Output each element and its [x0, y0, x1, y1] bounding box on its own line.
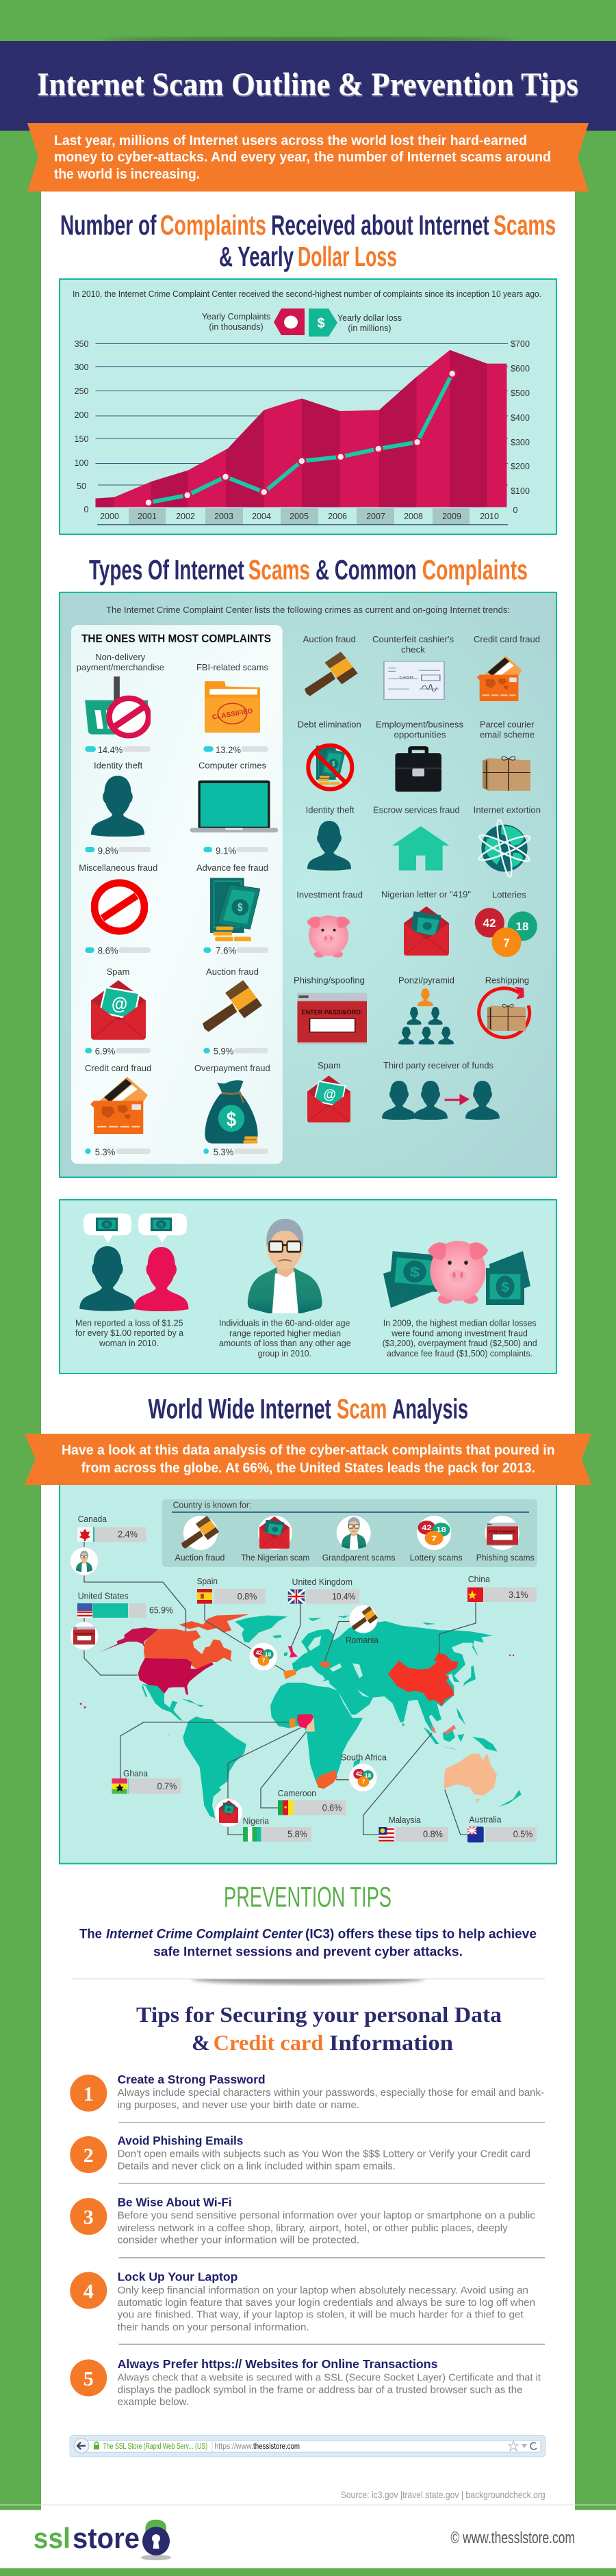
item: auction fraud trend: Auction fraud [303, 634, 356, 644]
legend: Yearly Complaints [202, 312, 270, 321]
tip 5: 5 [84, 2367, 94, 2390]
item: parcel scheme [480, 720, 535, 791]
item: nigerian letter: Nigerian letter or "419" [381, 889, 471, 899]
item: auction fraud trend [303, 634, 358, 696]
tip 3: 3 [84, 2206, 94, 2229]
heading: tips for securing data: Information [329, 2030, 453, 2055]
year axis: 2001 [138, 512, 157, 521]
browser address bar: thesslstore.com [253, 2443, 300, 2451]
map islands [79, 1655, 514, 1709]
item: lotteries [475, 890, 537, 957]
right axis labels: $600 [511, 364, 530, 373]
heading: complaints and dollar loss: & Yearly [219, 241, 294, 272]
country: spain [197, 1576, 266, 1604]
heading: tips for securing data [136, 2002, 502, 2055]
icon badge: nigerian scam [215, 1799, 242, 1826]
country: united kingdom: United Kingdom [292, 1577, 352, 1587]
legend item: lottery scams: Lottery scams [410, 1553, 463, 1563]
item: employment: Employment/business [376, 720, 464, 730]
tip 3: consider whether your information will be protected. [118, 2235, 359, 2246]
heading: types of scams: & Common [316, 554, 417, 586]
intro ribbon [27, 123, 589, 192]
line: yearly dollar loss [145, 370, 456, 506]
year axis: 2007 [366, 512, 385, 521]
icon badge: phishing us [70, 1622, 99, 1650]
legend: Yearly dollar loss [337, 313, 402, 323]
country: ghana [112, 1768, 181, 1793]
ribbon text [62, 1443, 555, 1476]
legend: (in millions) [348, 324, 392, 333]
country: united states: 65.9% [149, 1605, 173, 1616]
item: miscellaneous fraud: Miscellaneous fraud [79, 863, 157, 873]
legend item: nigerian scam: The Nigerian scam [241, 1553, 309, 1563]
country: united states: United States [78, 1591, 129, 1601]
item: overpayment fraud: Overpayment fraud [194, 1063, 270, 1073]
item: identity theft trend: Identity theft [306, 804, 355, 815]
item: spam: 6.9% [95, 1046, 115, 1057]
right axis labels: $300 [511, 438, 530, 447]
icon: piggy bank and money [383, 1241, 530, 1308]
country: china [467, 1574, 537, 1602]
country: canada: 2.4% [118, 1529, 138, 1540]
text: median losses [383, 1318, 537, 1358]
item: credit card fraud: Credit card fraud [85, 1063, 151, 1073]
browser address bar: The SSL Store (Rapid Web Serv... (US) [103, 2443, 207, 2451]
tip 1: ing purposes, and never use your birth date or name. [118, 2100, 359, 2111]
top band shadow [103, 38, 513, 47]
right axis labels: $200 [511, 462, 530, 471]
item: escrow [373, 804, 460, 871]
legend item: phishing scams [476, 1516, 535, 1563]
item: fbi scams: FBI-related scams [196, 662, 268, 672]
legend item: phishing scams: Phishing scams [476, 1553, 535, 1563]
legend: $ [317, 316, 325, 331]
item: miscellaneous fraud [79, 863, 157, 956]
item: advance fee fraud: 7.6% [216, 945, 236, 956]
map: eastern landmasses [270, 1616, 522, 1807]
heading: tips for securing data: & [192, 2030, 210, 2055]
item: identity theft: 9.8% [98, 845, 118, 856]
area: yearly complaints [95, 345, 506, 510]
panel: demographics [60, 1200, 556, 1374]
text: median losses: were found among investment fraud [391, 1328, 528, 1338]
tip 4: Lock Up Your Laptop [118, 2270, 238, 2284]
tip 2 [70, 2134, 530, 2173]
icon badge: grandparent canada [70, 1547, 99, 1575]
country: nigeria [243, 1815, 311, 1841]
left axis labels: 0 [84, 505, 89, 514]
tip 2: Don't open emails with subjects such as You Won the $$$ Lottery or Verify your Credit card [118, 2149, 530, 2160]
heading: complaints and dollar loss: Number of [60, 209, 157, 241]
text: age [219, 1318, 351, 1358]
item: advance fee fraud: Advance fee fraud [196, 863, 268, 873]
item: extortion: Internet extortion [474, 804, 541, 815]
intro text [54, 133, 551, 182]
tip 1: Always include special characters within your passwords, especially those for email and bank- [118, 2088, 544, 2099]
right axis labels [511, 339, 530, 515]
item: spam trend [307, 1060, 350, 1122]
item: extortion [474, 804, 541, 878]
item: identity theft trend [306, 804, 355, 871]
item: counterfeit check [372, 634, 454, 699]
legend item: nigerian scam [241, 1516, 309, 1563]
text: gender: woman in 2010. [99, 1338, 159, 1348]
item: third party receiver: Third party receiver of funds [383, 1060, 493, 1070]
country: ghana: 0.7% [157, 1780, 177, 1791]
heading: complaints and dollar loss: Dollar Loss [298, 241, 397, 272]
left axis labels: 50 [77, 482, 86, 491]
item: auction fraud [203, 967, 268, 1057]
item: miscellaneous fraud: 8.6% [98, 945, 118, 956]
country: china: China [468, 1574, 491, 1584]
item: computer crimes: Computer crimes [198, 761, 266, 770]
item: fbi scams [196, 662, 268, 755]
item: non-delivery [77, 652, 164, 755]
item: lotteries: 7 [503, 936, 510, 949]
left axis labels: 150 [75, 434, 88, 444]
tip 2: Details and never click on a link included within spam emails. [118, 2161, 396, 2172]
tip 4: automatic login feature that saves your login credentials and always be sure to log off when [118, 2298, 535, 2309]
left axis labels: 200 [75, 410, 88, 420]
year axis: 2010 [480, 512, 499, 521]
item: parcel scheme: email scheme [480, 730, 535, 740]
item: escrow: Escrow services fraud [373, 804, 460, 815]
left axis labels: 100 [75, 458, 88, 468]
prevention intro: Internet Crime Complaint Center [106, 1927, 304, 1941]
country: south africa [341, 1752, 387, 1791]
icon: older man [248, 1219, 322, 1313]
panel intro: The Internet Crime Complaint Center lists the following crimes as current and on-going Internet trends: [106, 605, 510, 615]
year axis: 2004 [252, 512, 271, 521]
tip 1: Create a Strong Password [118, 2073, 266, 2086]
text: gender: Men reported a loss of $1.25 [75, 1317, 183, 1328]
country: cameroon: 0.6% [322, 1802, 342, 1813]
tip 5 [70, 2357, 541, 2408]
country: united states [77, 1591, 173, 1618]
tip 3: Before you send sensitive personal information over your laptop or smartphone on a public [118, 2211, 535, 2222]
tip 3 [70, 2196, 535, 2246]
text: age: group in 2010. [258, 1348, 311, 1358]
tip 1: 1 [84, 2083, 94, 2105]
footer [0, 2510, 616, 2568]
item: phishing [294, 975, 367, 1044]
text: median losses: ($3,200), overpayment fraud ($2,500) and [383, 1338, 537, 1348]
item: lotteries: 18 [516, 920, 528, 933]
country: nigeria: 5.8% [287, 1828, 307, 1839]
tip 5: example below. [118, 2397, 189, 2408]
panel: complaints chart [60, 279, 556, 534]
heading: tips for securing data: Credit card [214, 2030, 324, 2055]
legend: (in thousands) [209, 322, 264, 332]
country: australia: Australia [469, 1815, 502, 1825]
item: non-delivery: Non-delivery [95, 652, 146, 662]
item: computer crimes [190, 761, 278, 856]
heading: types of scams: Complaints [422, 554, 528, 586]
item: non-delivery: payment/merchandise [77, 662, 164, 672]
tip 2: 2 [84, 2144, 94, 2167]
sources: Source: ic3.gov |travel.state.gov | backgroundcheck.org [341, 2489, 546, 2500]
item: investment fraud: Investment fraud [296, 890, 363, 900]
analysis ribbon [25, 1434, 591, 1485]
country: nigeria: Nigeria [243, 1815, 270, 1826]
heading: types of scams: Types Of Internet [89, 554, 244, 586]
year axis: 2005 [290, 512, 309, 521]
right axis labels: $100 [511, 486, 530, 496]
country: united kingdom: 10.4% [332, 1591, 356, 1602]
tip 4: you are finished. That way, if your laptop is stolen, it will be much harder for a thief to get [118, 2310, 524, 2321]
ribbon text: from across the globe. At 66%, the United States leads the pack for 2013. [81, 1461, 535, 1476]
item: debt elimination: Debt elimination [298, 720, 361, 730]
year axis: 2006 [328, 512, 347, 521]
map: western landmasses [100, 1614, 298, 1818]
country: canada [77, 1514, 146, 1542]
item: spam [85, 967, 151, 1057]
browser address bar [70, 2435, 546, 2457]
country: south africa: South Africa [341, 1752, 387, 1762]
icon: loss by gender [79, 1213, 189, 1311]
item: employment [376, 720, 464, 792]
logo: ssl store: ssl [34, 2522, 70, 2554]
year axis: 2000 [100, 512, 119, 521]
ribbon text: Have a look at this data analysis of the cyber-attack complaints that poured in [62, 1443, 555, 1458]
item: parcel scheme: Parcel courier [480, 720, 535, 730]
country: australia [467, 1815, 537, 1843]
item: third party receiver [382, 1060, 500, 1120]
item: credit card trend: Credit card fraud [474, 634, 540, 644]
year axis: 2002 [176, 512, 195, 521]
legend: country is known for [162, 1499, 537, 1567]
panel: types of scams [60, 592, 556, 1177]
title banner [0, 41, 616, 131]
country: australia: 0.5% [513, 1828, 532, 1839]
heading: complaints and dollar loss: Complaints [160, 209, 266, 241]
text: median losses: In 2009, the highest median dollar losses [383, 1318, 537, 1328]
country: malaysia: 0.8% [423, 1828, 443, 1839]
item: ponzi: Ponzi/pyramid [398, 975, 454, 985]
country: romania: Romania [346, 1635, 379, 1645]
title: Internet Scam Outline & Prevention Tips [37, 66, 578, 103]
country: cameroon [278, 1788, 346, 1815]
item: computer crimes: 9.1% [216, 845, 236, 856]
tip 3: wireless network in a coffee shop, library, airport, hotel, or other public places, deeply [117, 2223, 508, 2234]
heading: world wide analysis: Analysis [392, 1393, 468, 1424]
intro text: Last year, millions of Internet users across the world lost their hard-earned [54, 133, 527, 148]
text: age: Individuals in the 60-and-older age [219, 1318, 350, 1328]
left axis labels: 300 [75, 363, 88, 372]
legend item: grandparent scams [322, 1516, 396, 1563]
item: ponzi [398, 975, 454, 1044]
country: spain: Spain [197, 1576, 218, 1586]
text: age: range reported higher median [229, 1328, 341, 1338]
country: spain: 0.8% [238, 1590, 257, 1601]
country: china: 3.1% [509, 1589, 528, 1600]
heading: tips for securing data: Tips for Securing your personal Data [136, 2002, 502, 2027]
tip 3: Be Wise About Wi-Fi [118, 2196, 232, 2209]
item: spam trend: Spam [318, 1060, 341, 1070]
item: identity theft [85, 761, 151, 856]
heading: world wide analysis: World Wide Internet [148, 1393, 331, 1424]
heading: world wide analysis: Scam [337, 1393, 387, 1424]
item: debt elimination [298, 720, 361, 789]
year axis: 2003 [214, 512, 233, 521]
chart note: In 2010, the Internet Crime Complaint Center received the second-highest number of complaints since its inception 10 years ago. [73, 289, 541, 299]
right axis labels: $500 [511, 389, 530, 398]
item: auction fraud: 5.9% [214, 1046, 233, 1057]
white content panel [41, 192, 575, 2510]
item: investment fraud [296, 890, 363, 958]
prevention intro: (IC3) offers these tips to help achieve [305, 1927, 537, 1941]
item: overpayment fraud: 5.3% [214, 1146, 233, 1157]
item: overpayment fraud [194, 1063, 270, 1157]
browser address bar: https://www. [214, 2443, 253, 2451]
tip 4: 4 [84, 2281, 94, 2302]
right axis labels: $700 [511, 339, 530, 349]
legend item: auction fraud: Auction fraud [175, 1553, 224, 1563]
year axis: 2008 [404, 512, 423, 521]
legend item: grandparent scams: Grandparent scams [322, 1553, 396, 1563]
item: non-delivery: 14.4% [98, 744, 123, 755]
heading: complaints and dollar loss: Received about Internet [271, 209, 489, 241]
left axis labels [75, 339, 89, 514]
country: malaysia: Malaysia [389, 1815, 422, 1825]
right axis labels: 0 [513, 505, 518, 515]
icon badge: romania gavel [349, 1605, 378, 1633]
legend: country is known for: Country is known for: [173, 1499, 251, 1510]
text: median losses: advance fee fraud ($1,500) complaints. [387, 1348, 532, 1358]
tip 4 [70, 2270, 535, 2333]
text: age: amounts of loss than any other age [219, 1338, 351, 1348]
item: reshipping: Reshipping [485, 975, 529, 985]
item: lotteries: Lotteries [492, 890, 526, 900]
legend item: auction fraud [175, 1516, 224, 1563]
year axis: 2009 [442, 512, 461, 521]
tip 5: Always check that a website is secured with a SSL (Secure Socket Layer) Certificate and that it [118, 2372, 541, 2383]
item: reshipping [479, 975, 530, 1038]
item: auction fraud: Auction fraud [206, 967, 259, 977]
tip 5: displays the padlock symbol in the frame or address bar of a trusted browser such as the [118, 2384, 523, 2395]
tip 5: Always Prefer https:// Websites for Online Transactions [118, 2357, 438, 2371]
prevention intro [79, 1927, 537, 1959]
intro text: money to cyber-attacks. And every year, the number of Internet scams around [54, 150, 551, 165]
intro text: the world is increasing. [54, 167, 200, 182]
heading: complaints and dollar loss: Scams [493, 209, 556, 241]
tip 2: Avoid Phishing Emails [118, 2134, 244, 2148]
heading: prevention tips: PREVENTION TIPS [224, 1881, 392, 1913]
text: gender: for every $1.00 reported by a [75, 1328, 184, 1338]
item: identity theft: Identity theft [94, 761, 143, 770]
prevention intro: safe Internet sessions and prevent cyber attacks. [153, 1945, 463, 1959]
panel: world map [60, 1477, 556, 1863]
item: nigerian letter [381, 889, 471, 956]
country: cameroon: Cameroon [278, 1788, 316, 1798]
tip 4: their hands on your personal information. [118, 2322, 309, 2333]
prevention intro: The [79, 1927, 102, 1941]
item: counterfeit check: Counterfeit cashier's [372, 634, 454, 644]
legend [202, 308, 402, 337]
item: phishing: Phishing/spoofing [294, 975, 365, 985]
country: canada: Canada [78, 1514, 107, 1524]
tip 1 [70, 2073, 544, 2112]
item: lotteries: 42 [483, 917, 496, 930]
country: united kingdom [288, 1577, 359, 1604]
left axis labels: 250 [75, 386, 88, 396]
logo: ssl store [34, 2520, 171, 2560]
item: spam: Spam [107, 967, 129, 977]
item: credit card trend [474, 634, 540, 701]
sub-panel heading: THE ONES WITH MOST COMPLAINTS [81, 633, 271, 645]
connector lines [84, 1542, 476, 1835]
logo: ssl store: store [73, 2522, 140, 2554]
tip 4: Only keep financial information on your laptop when absolutely necessary. Avoid using an [118, 2285, 528, 2296]
right axis labels: $400 [511, 413, 530, 423]
item: employment: opportunities [394, 730, 446, 740]
grid lines [96, 343, 508, 485]
left axis labels: 350 [75, 339, 88, 349]
heading: types of scams [89, 554, 528, 586]
item: credit card fraud [85, 1063, 151, 1157]
country: ghana: Ghana [123, 1768, 149, 1778]
item: advance fee fraud [196, 863, 268, 956]
country: malaysia [378, 1815, 448, 1841]
legend item: lottery scams [410, 1516, 463, 1563]
icon badge: lottery spain [249, 1643, 277, 1670]
heading: types of scams: Scams [248, 554, 310, 586]
text: gender [75, 1317, 184, 1348]
item: fbi scams: 13.2% [216, 744, 241, 755]
heading: complaints and dollar loss [60, 209, 556, 272]
item: credit card fraud: 5.3% [95, 1146, 115, 1157]
year axis [97, 508, 508, 525]
sub-panel: most complaints [71, 625, 283, 1164]
item: counterfeit check: check [401, 644, 426, 655]
